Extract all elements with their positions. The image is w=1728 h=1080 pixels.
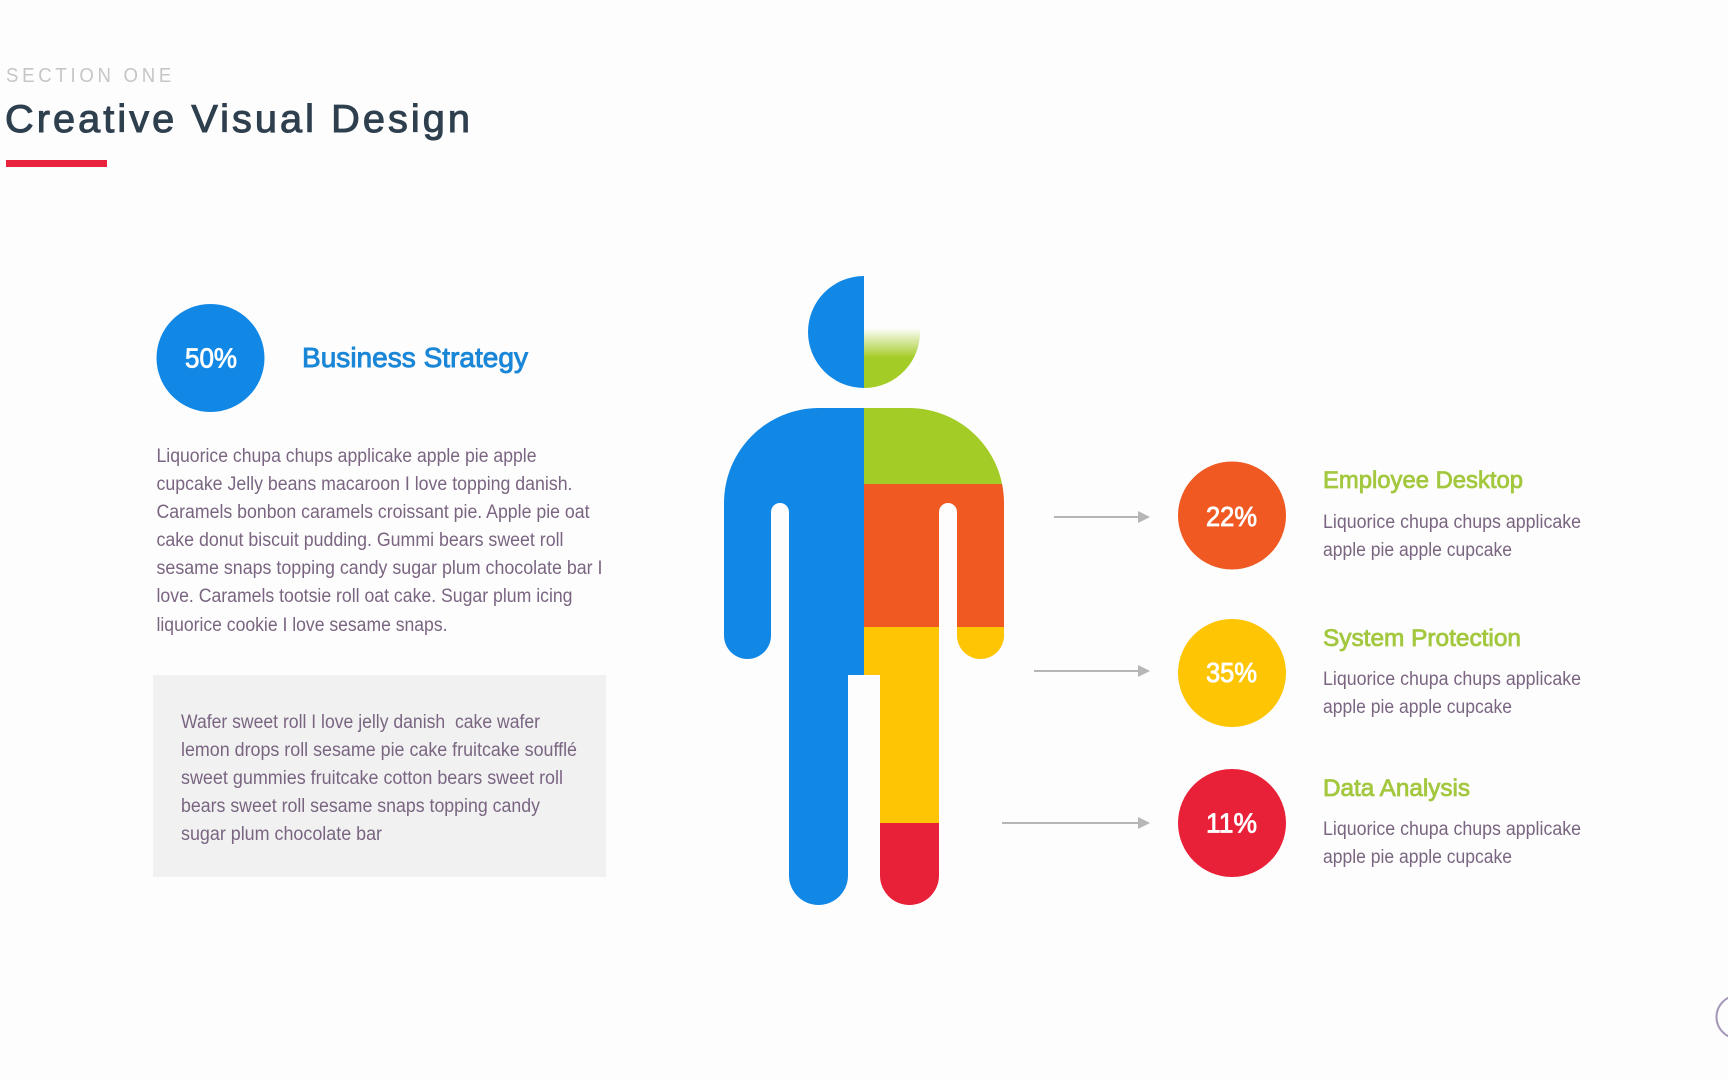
item: system protection — [1178, 619, 1581, 727]
description — [1323, 512, 1581, 561]
callout box: lemon drops roll sesame pie cake fruitcake soufflé — [181, 740, 577, 761]
arrow: to 35% — [1034, 665, 1150, 677]
heading: system protection: System Protection — [1323, 625, 1521, 652]
arrow: to 22% — [1054, 511, 1150, 523]
badge: 22%: 22% — [1206, 501, 1257, 532]
section label: SECTION ONE — [6, 65, 175, 87]
corner ring — [1716, 996, 1728, 1038]
badge: 50%: 50% — [185, 342, 237, 374]
body paragraph: love. Caramels tootsie roll oat cake. Sugar plum icing — [156, 586, 572, 607]
callout box: bears sweet roll sesame snaps topping candy — [181, 796, 540, 817]
title underline — [6, 160, 107, 167]
description: Liquorice chupa chups applicake — [1323, 512, 1581, 533]
badge: 35% — [1178, 619, 1286, 727]
description — [1323, 669, 1581, 718]
body paragraph: cupcake Jelly beans macaroon I love topping danish. — [156, 474, 572, 495]
badge: 50% — [156, 304, 264, 412]
description: apple pie apple cupcake — [1323, 847, 1512, 868]
body: left half blue — [724, 408, 864, 905]
body paragraph — [156, 446, 602, 636]
callout box: sugar plum chocolate bar — [181, 824, 383, 845]
panel: business strategy — [153, 304, 606, 877]
body paragraph: Liquorice chupa chups applicake apple pie apple — [156, 446, 536, 467]
item: employee desktop — [1178, 462, 1581, 570]
description: Liquorice chupa chups applicake — [1323, 669, 1581, 690]
badge: 22% — [1178, 462, 1286, 570]
badge: 11% — [1178, 769, 1286, 877]
description — [1323, 819, 1581, 868]
body paragraph: sesame snaps topping candy sugar plum chocolate bar I — [156, 558, 602, 579]
callout box: Wafer sweet roll I love jelly danish cake wafer — [181, 712, 541, 733]
heading: business strategy: Business Strategy — [302, 342, 528, 373]
badge: 35%: 35% — [1206, 657, 1257, 688]
description: Liquorice chupa chups applicake — [1323, 819, 1581, 840]
badge: 11%: 11% — [1206, 808, 1257, 838]
item: data analysis — [1178, 769, 1581, 877]
body: right half colour bands — [864, 400, 1009, 913]
arrow: to 11% — [1002, 817, 1150, 829]
heading: data analysis: Data Analysis — [1323, 775, 1470, 802]
title: Creative Visual Design — [5, 98, 473, 141]
heading: employee desktop: Employee Desktop — [1323, 467, 1523, 494]
description: apple pie apple cupcake — [1323, 697, 1512, 718]
head: right half green gradient — [864, 328, 920, 388]
callout box — [153, 675, 606, 877]
description: apple pie apple cupcake — [1323, 540, 1512, 561]
callout box: sweet gummies fruitcake cotton bears sweet roll — [181, 768, 563, 789]
human figure chart — [724, 276, 1009, 913]
body paragraph: Caramels bonbon caramels croissant pie. Apple pie oat — [156, 502, 590, 523]
body paragraph: liquorice cookie I love sesame snaps. — [156, 615, 448, 636]
body paragraph: cake donut biscuit pudding. Gummi bears sweet roll — [156, 530, 564, 551]
head: left half blue — [808, 276, 864, 388]
